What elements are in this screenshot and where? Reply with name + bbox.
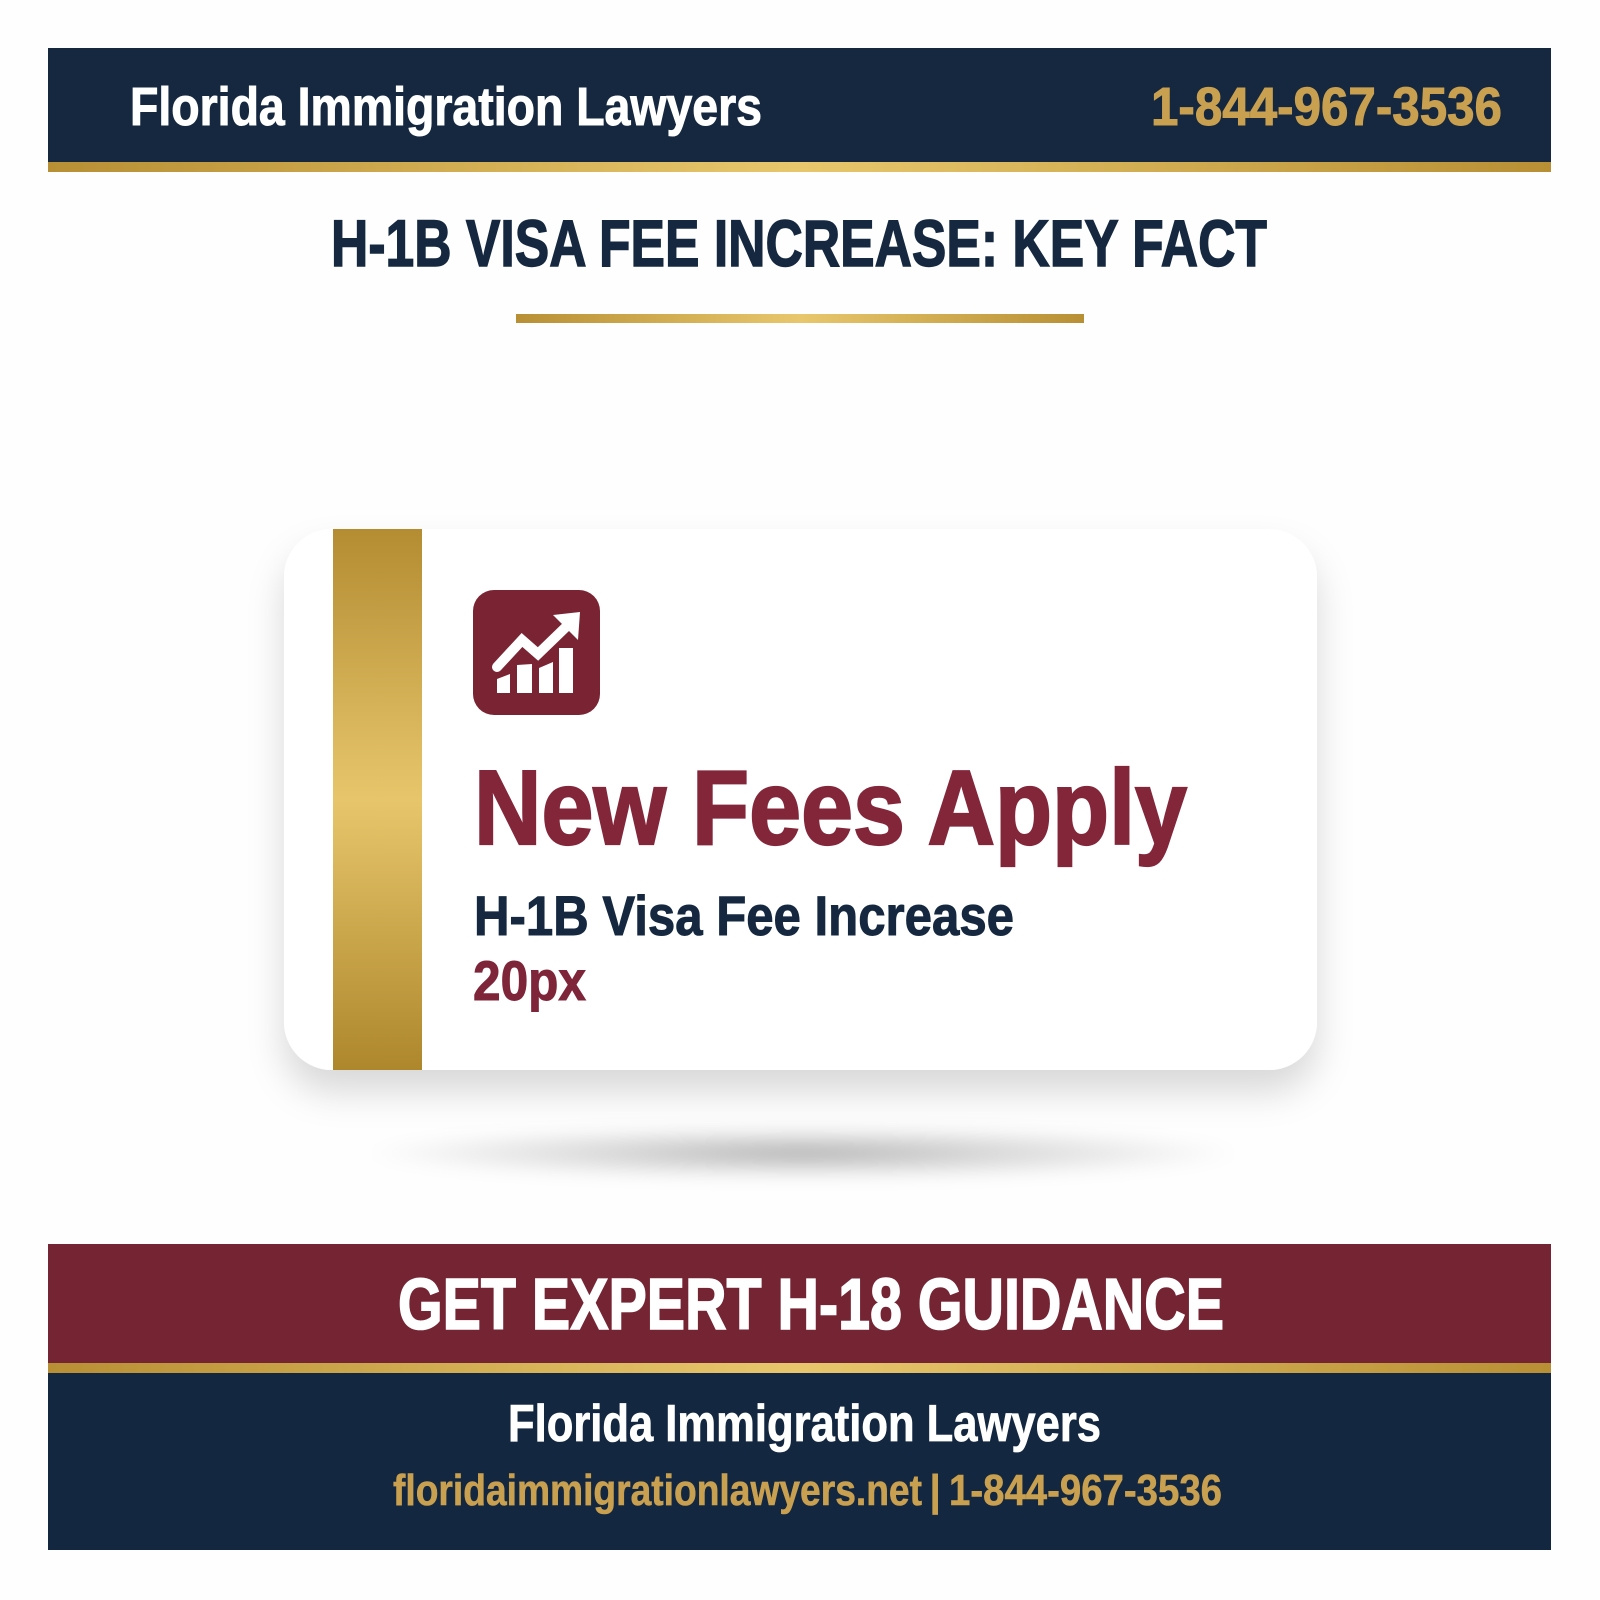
- card value text: 20px: [473, 949, 586, 1012]
- footer contact line: |: [929, 1466, 941, 1516]
- header firm name: Florida Immigration Lawyers: [130, 77, 762, 137]
- call to action banner: [48, 1244, 1551, 1363]
- icon: rising chart: [473, 590, 600, 715]
- footer: [48, 1373, 1551, 1550]
- header bar: [48, 48, 1551, 172]
- footer divider: [48, 1363, 1551, 1373]
- title: H-1B VISA FEE INCREASE: KEY FACT: [331, 206, 1267, 280]
- footer contact line: floridaimmigrationlawyers.net: [393, 1466, 922, 1515]
- gold accent strip: [333, 529, 422, 1070]
- card headline: New Fees Apply: [474, 749, 1187, 867]
- footer firm name: Florida Immigration Lawyers: [508, 1395, 1101, 1453]
- panel: key fact card: [284, 529, 1317, 1070]
- title underline: [516, 314, 1084, 323]
- call to action text: GET EXPERT H-18 GUIDANCE: [398, 1265, 1224, 1345]
- header phone number: 1-844-967-3536: [1151, 77, 1502, 137]
- card subtitle: H-1B Visa Fee Increase: [474, 884, 1014, 947]
- footer contact line: 1-844-967-3536: [949, 1466, 1222, 1515]
- ground shadow: [363, 1126, 1243, 1180]
